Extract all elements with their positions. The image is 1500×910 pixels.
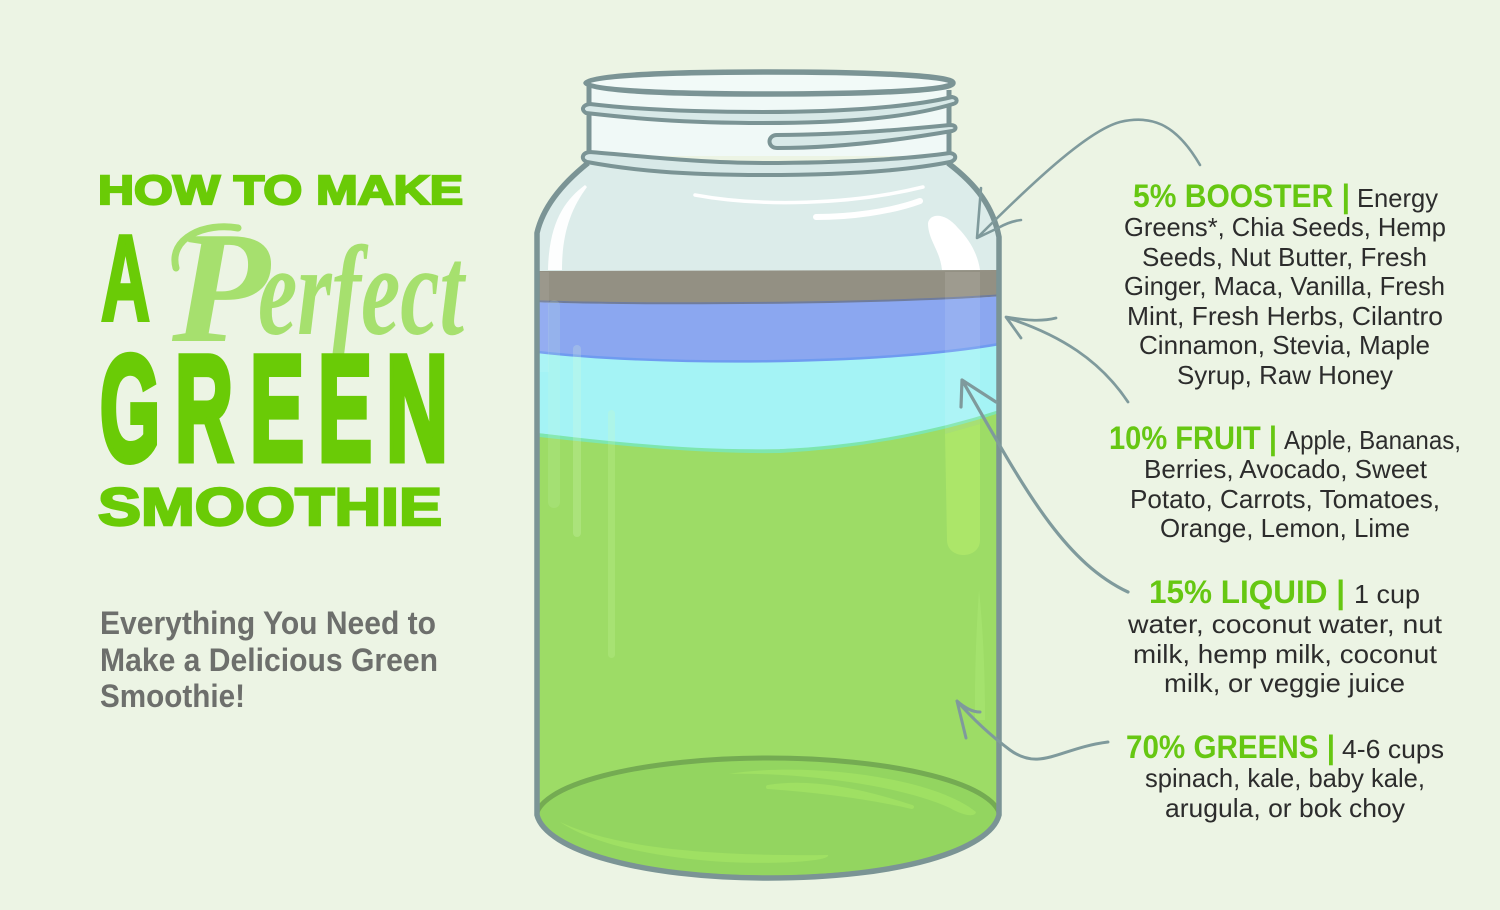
text block: fruit: Potato, Carrots, Tomatoes, <box>1130 484 1440 514</box>
text block: fruit <box>1109 420 1461 543</box>
title word: Perfect: P <box>171 198 271 376</box>
text block: fruit: 10% FRUIT | <box>1109 420 1277 456</box>
title word: green: G <box>100 324 160 492</box>
title word: Perfect <box>171 198 466 376</box>
text block: liquid: 1 cup <box>1354 579 1420 609</box>
arrow: fruit <box>1006 317 1128 402</box>
text block: greens: spinach, kale, baby kale, <box>1145 763 1425 793</box>
text block: booster <box>1124 178 1446 390</box>
text block: liquid: water, coconut water, nut <box>1127 609 1443 639</box>
title word: Perfect: erfect <box>258 220 466 362</box>
title line: smoothie: SMOOTHIE <box>98 478 442 537</box>
title word: green: N <box>386 324 448 492</box>
text block: greens: 70% GREENS | <box>1126 729 1335 765</box>
text block: liquid: milk, hemp milk, coconut <box>1133 639 1438 669</box>
text block: liquid: milk, or veggie juice <box>1164 668 1405 698</box>
subtitle: Smoothie! <box>100 678 245 714</box>
title word: green: E <box>250 324 304 492</box>
text block: booster: 5% BOOSTER | <box>1133 178 1350 214</box>
jar glass body <box>537 163 999 878</box>
jar base ellipse <box>536 758 1000 878</box>
title <box>98 167 466 537</box>
text block: fruit: Berries, Avocado, Sweet <box>1144 454 1428 484</box>
layer: fruit <box>530 296 1005 361</box>
subtitle: Make a Delicious Green <box>100 642 438 678</box>
glass highlights <box>548 185 587 270</box>
text block: booster: Energy <box>1357 183 1438 213</box>
text block: booster: Ginger, Maca, Vanilla, Fresh <box>1124 271 1445 301</box>
layer: liquid <box>530 341 1005 449</box>
text block: liquid <box>1127 574 1443 698</box>
text block: fruit: Apple, Bananas, <box>1284 425 1461 455</box>
text block: fruit: Orange, Lemon, Lime <box>1160 513 1410 543</box>
text block: booster: Syrup, Raw Honey <box>1177 360 1393 390</box>
arrow: booster <box>977 120 1200 238</box>
jar neck <box>583 72 957 175</box>
arrow: liquid <box>961 380 1128 592</box>
jar contents <box>530 185 1005 885</box>
jar outline <box>537 163 999 878</box>
subtitle: Everything You Need to <box>100 605 436 641</box>
text block: booster: Seeds, Nut Butter, Fresh <box>1142 242 1427 272</box>
layer: booster <box>530 270 1005 303</box>
title word: A: A <box>101 210 150 346</box>
text block: greens <box>1126 729 1444 823</box>
text block: booster: Cinnamon, Stevia, Maple <box>1139 330 1430 360</box>
title line: how to make: HOW TO MAKE <box>98 167 463 213</box>
text block: booster: Mint, Fresh Herbs, Cilantro <box>1127 301 1443 331</box>
layer: greens <box>540 414 996 804</box>
subtitle <box>100 605 438 714</box>
arrow: greens <box>957 701 1108 759</box>
title word: green: E <box>318 324 372 492</box>
title word: green <box>100 324 448 492</box>
text block: greens: arugula, or bok choy <box>1165 793 1405 823</box>
text block: greens: 4-6 cups <box>1342 734 1444 764</box>
jar <box>530 72 1005 885</box>
text block: booster: Greens*, Chia Seeds, Hemp <box>1124 212 1446 242</box>
title word: green: R <box>175 324 233 492</box>
text block: liquid: 15% LIQUID | <box>1149 574 1345 610</box>
